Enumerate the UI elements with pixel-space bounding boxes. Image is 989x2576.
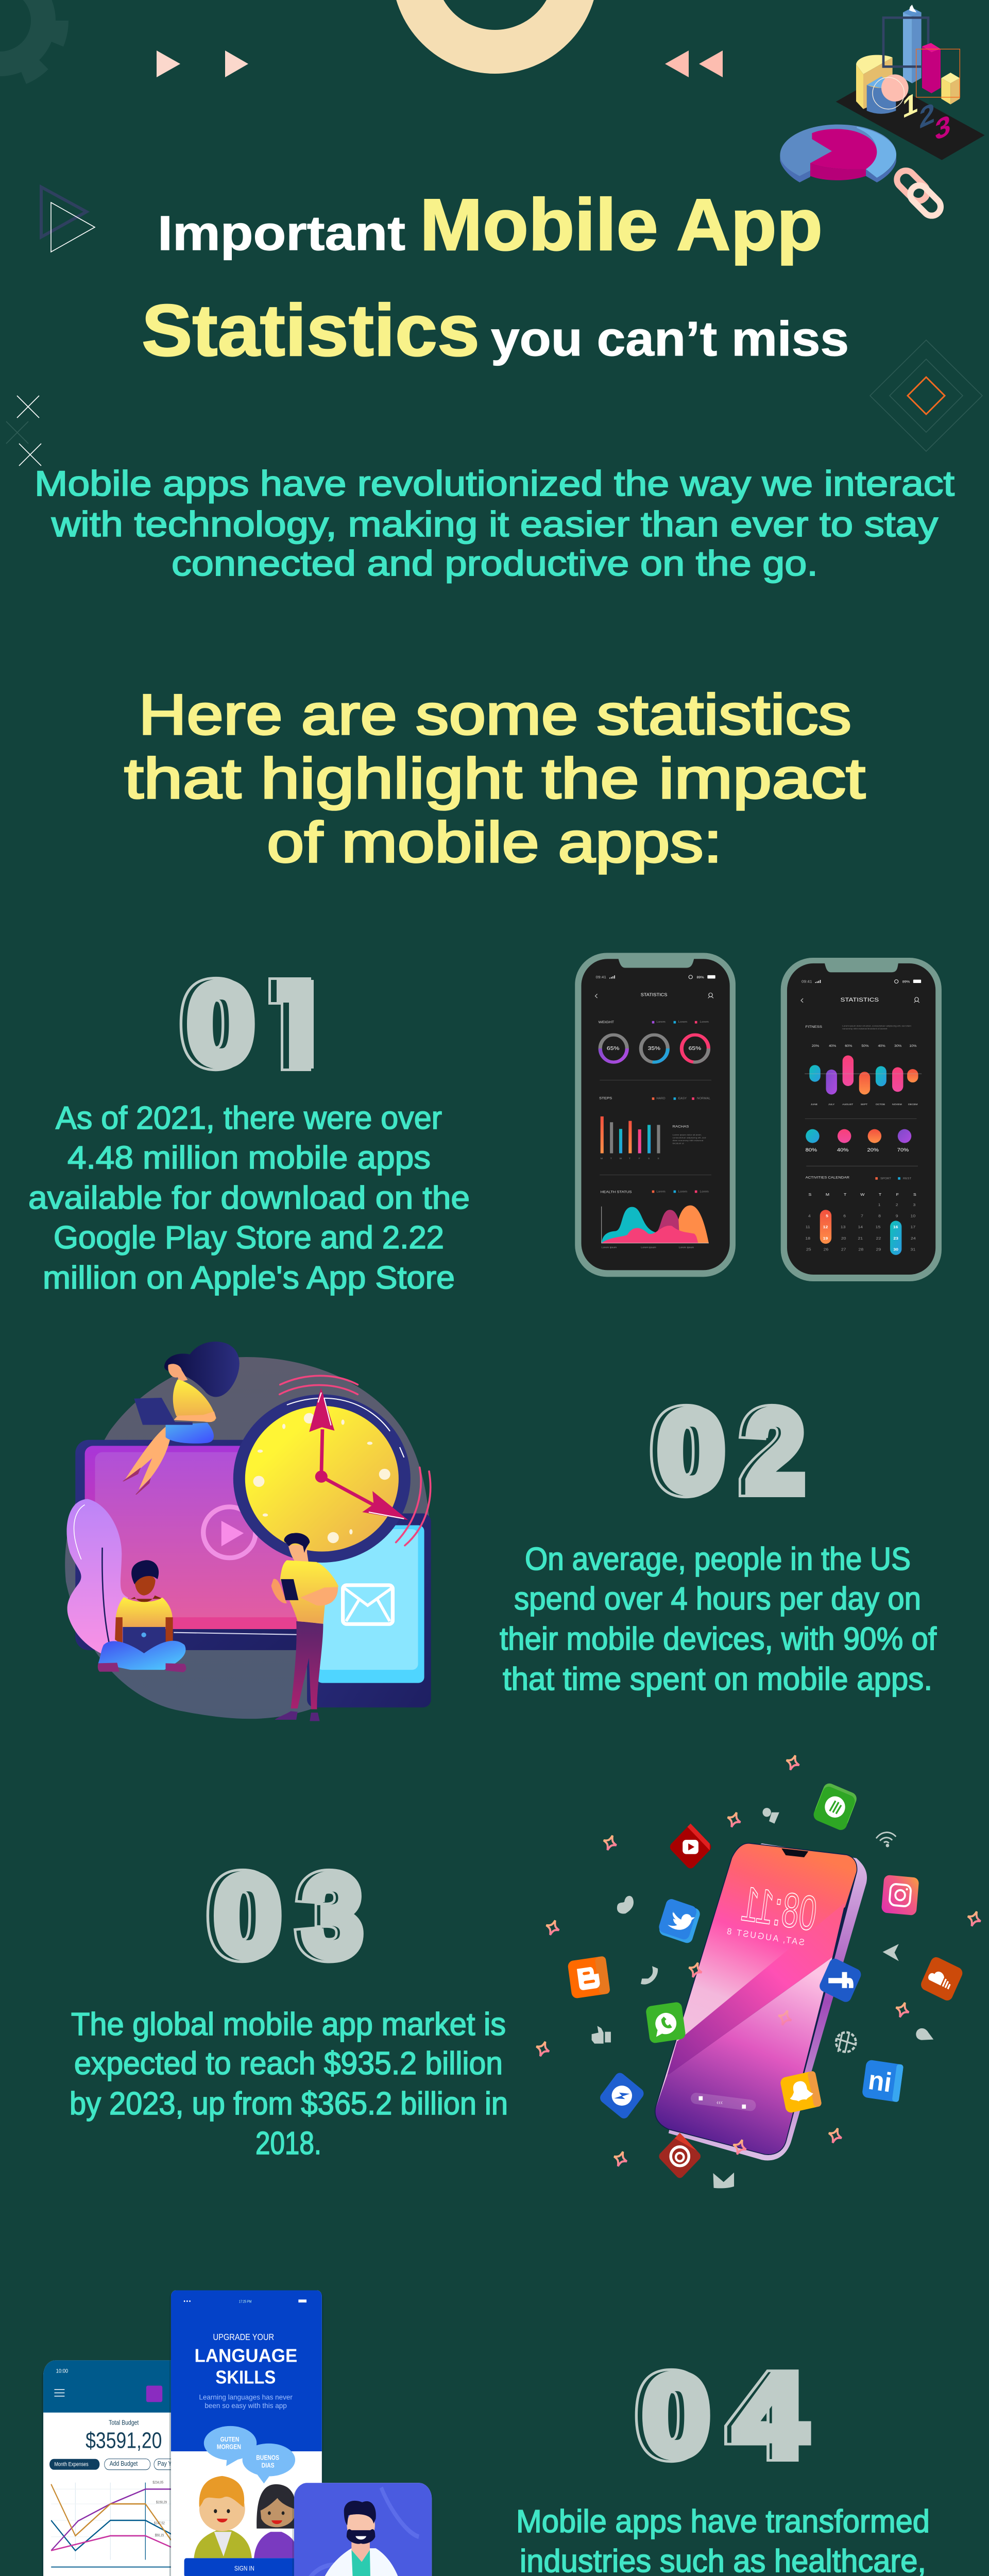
intro paragraph: Mobile apps have revolutionized the way we interact (35, 464, 954, 503)
stat 03 number: 3 (298, 1851, 362, 1980)
intro paragraph: with technology, making it easier than ever to stay (51, 504, 939, 544)
boy (194, 2476, 252, 2558)
weight rings: 65% (689, 1046, 701, 1052)
activities calendar: 29 (876, 1247, 881, 1251)
steps bars: consectetuer adipiscing elit, sed (673, 1137, 706, 1139)
activities calendar: 15 (876, 1225, 881, 1229)
stat 03 text: 2018. (255, 2126, 321, 2161)
stat 04 number: 0 (637, 2350, 706, 2480)
phone two: Lorem ipsum dolor sit amet, consectetuer adipiscing elit, sed diam (842, 1025, 911, 1027)
phone one: STATISTICS (641, 992, 668, 997)
activities calendar: T (844, 1193, 846, 1197)
activities calendar: S (808, 1193, 811, 1197)
plant (66, 1499, 128, 1663)
illustration: phone with floating app icons (534, 1753, 983, 2188)
illustration: isometric charts: 3 (935, 109, 951, 147)
stat 01 number: 0 (186, 959, 255, 1089)
speech bubbles (204, 2426, 295, 2484)
stat 03 text: by 2023, up from $365.2 billion in (70, 2086, 508, 2122)
girl (254, 2484, 295, 2558)
section heading: of mobile apps: (267, 810, 722, 874)
title line two: you can’t miss (491, 312, 849, 366)
fitness pills: SEPT (861, 1103, 867, 1106)
stat 02 number: 2 (745, 1386, 805, 1516)
language app screen (169, 2291, 323, 2576)
phone two: FITNESS (806, 1025, 822, 1029)
stat 03 number: 3 (298, 1851, 362, 1980)
health status area chart (601, 1190, 709, 1249)
stat 01 text: 4.48 million mobile apps (67, 1140, 431, 1176)
progress circles: 80% (806, 1148, 817, 1153)
stat 04 number: 4 (729, 2350, 805, 2480)
stat 02 text: their mobile devices, with 90% of (500, 1621, 937, 1657)
activities calendar: 26 (824, 1247, 829, 1251)
stat 01 text: available for download on the (28, 1180, 470, 1216)
health status area chart: Lorem ipsum (602, 1246, 617, 1249)
phone one: 89% (696, 976, 704, 979)
phone (656, 1843, 867, 2160)
title line one (158, 184, 823, 266)
app icon: bird (657, 1897, 702, 1944)
stat 04 text (506, 2504, 940, 2576)
steps bars: Lorem ipsum dolor sit amet, (673, 1133, 702, 1136)
stat 01 number (181, 959, 314, 1089)
fitness pills: OCTOB (876, 1103, 885, 1106)
phone one: 09:41 (596, 975, 606, 979)
stat 04 number (637, 2350, 806, 2480)
stat 04 number: 4 (729, 2350, 805, 2480)
stat 02 number: 2 (741, 1386, 804, 1516)
decoration: right-pointing triangles (157, 50, 248, 77)
budget app screen (42, 2360, 213, 2576)
fitness pills: 40% (829, 1044, 836, 1048)
title line one: Mobile App (420, 184, 823, 266)
decoration: gear corner (0, 0, 61, 81)
progress circles: 40% (837, 1148, 848, 1153)
steps bars: HARD (656, 1097, 666, 1100)
activities calendar: 16 (893, 1225, 898, 1229)
steps bars: S (648, 1158, 650, 1160)
app icon: ghost (779, 2071, 822, 2114)
activities calendar: ACTIVITIES CALENDAR (806, 1176, 849, 1179)
stat 04 number: 0 (642, 2350, 711, 2480)
title line two: Statistics (142, 290, 480, 371)
stat 02 number: 0 (652, 1386, 721, 1516)
section heading (124, 683, 865, 874)
speech bubbles: GUTEN (220, 2436, 239, 2443)
activities calendar: T (879, 1193, 881, 1197)
stat 04 text: Mobile apps have transformed (516, 2504, 930, 2539)
phone one (575, 953, 736, 1277)
stat 03 number: 0 (213, 1851, 282, 1980)
phone two: STATISTICS (841, 996, 879, 1003)
stat 03 text: The global mobile app market is (71, 2007, 506, 2042)
stat 03 number: 3 (302, 1851, 363, 1980)
steps bars: diam nonummy nibh euismod (673, 1139, 704, 1142)
fitness pills: 30% (894, 1044, 902, 1048)
activities calendar: 5 (826, 1214, 828, 1218)
section heading: Here are some statistics (139, 683, 851, 747)
activities calendar: 2 (896, 1202, 898, 1207)
steps bars: F (639, 1158, 640, 1160)
intro paragraph (35, 464, 954, 583)
weight rings: Lorem (656, 1021, 666, 1024)
activities calendar: 19 (823, 1236, 828, 1241)
progress circles: 20% (867, 1148, 879, 1153)
language app screen: SKILLS (215, 2367, 276, 2387)
weight rings: WEIGHT (599, 1021, 615, 1024)
app icon: at sign (657, 2133, 702, 2180)
stat 03 text (70, 2007, 508, 2161)
stat 04 number: 4 (734, 2350, 806, 2480)
activities calendar (805, 1176, 916, 1255)
budget line chart (51, 2483, 182, 2567)
title line one: Important (158, 206, 405, 261)
doctor app screen (292, 2483, 433, 2576)
activities calendar: 10 (911, 1214, 916, 1218)
phone: SAT, AUGUST 8 (725, 1926, 805, 1947)
motion arcs (280, 1376, 431, 1546)
stat 02 text: spend over 4 hours per day on (514, 1581, 921, 1617)
activities calendar: 13 (841, 1225, 846, 1229)
app icon: social f (818, 1957, 863, 2004)
steps bars: STEPS (599, 1096, 612, 1100)
progress circles (806, 1129, 911, 1153)
stat 02 number: 0 (652, 1386, 721, 1516)
health status area chart: Lorem (678, 1191, 687, 1193)
activities calendar: 23 (893, 1236, 899, 1241)
activities calendar: 24 (911, 1236, 916, 1241)
woman with laptop (123, 1342, 240, 1495)
decoration: nested diamonds (870, 340, 982, 451)
stat 03 number: 0 (208, 1851, 277, 1980)
stat 03 number: 0 (208, 1851, 277, 1980)
steps bars: EASY (678, 1097, 687, 1100)
decoration: cream ring (414, 0, 576, 52)
budget app screen: 10:00 (56, 2368, 68, 2375)
fitness pills: JUNE (811, 1103, 817, 1106)
activities calendar: 7 (861, 1214, 863, 1218)
fitness pills: 40% (878, 1044, 885, 1048)
activities calendar: 8 (878, 1214, 881, 1218)
health status area chart: Lorem (700, 1191, 709, 1193)
budget app screen: $50,15 (155, 2534, 164, 2537)
weight rings: 65% (607, 1046, 619, 1052)
fitness pills: 20% (812, 1044, 819, 1048)
steps bars: W (619, 1158, 622, 1160)
clock (233, 1388, 411, 1563)
illustration: isometric charts (780, 5, 985, 219)
stat 01 text: As of 2021, there were over (56, 1100, 442, 1136)
fitness pills: AUGUST (842, 1103, 853, 1106)
steps bars: RACHAS (673, 1125, 689, 1128)
activities calendar: REST (903, 1177, 912, 1180)
activities calendar: 20 (841, 1236, 846, 1241)
budget app screen: Month Expenses (55, 2462, 89, 2468)
activities calendar: 11 (806, 1225, 810, 1229)
steps bars: S (657, 1158, 659, 1160)
app icon: ni (862, 2059, 903, 2103)
illustration: people, clock and devices (65, 1342, 431, 1721)
activities calendar: F (896, 1193, 899, 1197)
fitness pills: JULY (828, 1103, 835, 1106)
steps bars: tincidunt ut (673, 1142, 685, 1145)
fitness pills: NOVEM (892, 1103, 902, 1106)
section heading: that highlight the impact (124, 747, 865, 810)
budget app screen: $150,29 (156, 2500, 167, 2504)
health status area chart: HEALTH STATUS (601, 1190, 632, 1194)
stat 03 text: expected to reach $935.2 billion (74, 2046, 503, 2081)
activities calendar: 14 (858, 1225, 863, 1229)
language app screen: Learning languages has never (199, 2393, 293, 2401)
activities calendar: M (826, 1193, 829, 1197)
illustration: isometric charts: 1 (902, 86, 918, 125)
steps bars: T (610, 1158, 612, 1160)
health status area chart: Lorem (656, 1191, 666, 1193)
app icon: ni: ni (866, 2064, 894, 2098)
activities calendar: 31 (911, 1247, 916, 1251)
stat 04 number: 0 (637, 2350, 706, 2480)
stat 02 text: that time spent on mobile apps. (503, 1662, 932, 1697)
budget app screen: Pay Y (158, 2460, 172, 2467)
weight rings: Lorem (700, 1021, 709, 1024)
budget app screen: $3591,20 (86, 2428, 162, 2453)
app icon: chat (645, 2002, 686, 2044)
speech bubbles: BUENOS (256, 2454, 279, 2462)
steps bars: T (629, 1158, 630, 1160)
activities calendar: 9 (896, 1214, 898, 1218)
activities calendar: 6 (843, 1214, 846, 1218)
phone two: 89% (902, 980, 910, 984)
steps bars: NORMAL (697, 1097, 710, 1100)
activities calendar: SPORT (880, 1177, 892, 1180)
steps bars: M (601, 1158, 603, 1160)
activities calendar: 1 (878, 1202, 881, 1207)
fitness pills: DECEM (908, 1103, 918, 1106)
health status area chart: Lorem ipsum (641, 1246, 656, 1249)
stat 02 text: On average, people in the US (525, 1541, 911, 1577)
steps bars (599, 1096, 710, 1160)
decoration: outlined play triangles (41, 187, 95, 252)
stat 03 number (208, 1851, 363, 1980)
progress circles: 70% (897, 1148, 909, 1153)
stat 02 number: 2 (741, 1386, 804, 1516)
activities calendar: 21 (858, 1236, 863, 1241)
language app screen: UPGRADE YOUR (213, 2332, 274, 2342)
activities calendar: 28 (859, 1247, 864, 1251)
intro paragraph: connected and productive on the go. (172, 544, 818, 583)
activities calendar: 27 (841, 1247, 846, 1251)
language app screen: 17:25 PM (239, 2300, 251, 2304)
illustration: isometric charts: 2 (919, 96, 935, 135)
phone two: 09:41 (802, 979, 812, 984)
standing man with tablet (271, 1533, 338, 1721)
sparkles (534, 1753, 983, 2168)
activities calendar: 4 (808, 1214, 811, 1218)
fitness pills: 10% (909, 1044, 917, 1048)
speech bubbles: MORGEN (217, 2444, 241, 2451)
small grey icons (592, 1808, 933, 2188)
budget app screen: Total Budget (109, 2419, 139, 2427)
app icon: blog (567, 1956, 610, 1999)
stat 02 number (652, 1386, 805, 1516)
phone: ‹‹‹ (717, 2099, 723, 2106)
app icon: cloud (919, 1955, 964, 2003)
activities calendar: W (860, 1193, 865, 1197)
weight rings (599, 1021, 709, 1062)
illustration: three app screens (42, 2291, 433, 2576)
weight rings: 35% (648, 1046, 660, 1052)
budget app screen: $147,52 (154, 2521, 165, 2526)
activities calendar: 17 (911, 1225, 916, 1229)
activities calendar: 12 (823, 1225, 828, 1229)
phone two (781, 958, 942, 1281)
stat 02 number: 0 (657, 1386, 726, 1516)
phone: 08:11 (739, 1876, 820, 1941)
title line two (142, 290, 849, 371)
language app screen: been so easy with this app (204, 2401, 287, 2410)
fitness pills: 60% (845, 1044, 852, 1048)
activities calendar: 25 (806, 1247, 811, 1251)
speech bubbles: DIAS (262, 2462, 275, 2469)
doctor (313, 2501, 406, 2576)
stat 01 number: 0 (181, 959, 250, 1089)
fitness pills (805, 1044, 922, 1106)
budget app screen: Add Budget (110, 2460, 138, 2467)
activities calendar: S (913, 1193, 916, 1197)
activities calendar: 22 (876, 1236, 881, 1241)
phone two: nonummy nibh euismod tincidunt ut laoreet (842, 1028, 888, 1030)
app icon: camera (881, 1875, 919, 1916)
mail tablet (307, 1514, 431, 1707)
stat 01 text: Google Play Store and 2.22 (54, 1220, 444, 1256)
decoration: cross marks (6, 396, 41, 466)
activities calendar: 3 (913, 1202, 916, 1207)
language app screen: LANGUAGE (194, 2345, 297, 2366)
seated man with laptop (98, 1560, 186, 1672)
language app screen: SIGN IN (234, 2565, 254, 2572)
stat 01 number: 0 (181, 959, 250, 1089)
app icon: video (668, 1823, 713, 1870)
app icon: green (812, 1782, 859, 1832)
decoration: left-pointing triangles (665, 50, 723, 77)
budget app screen: $234,05 (152, 2481, 164, 2485)
stat 01 text: million on Apple's App Store (43, 1260, 455, 1296)
stat 01 text (28, 1100, 470, 1296)
weight rings: Lorem (678, 1021, 687, 1024)
fitness pills: 50% (861, 1044, 869, 1048)
app icon: messenger (598, 2071, 645, 2121)
health status area chart: Lorem ipsum (679, 1246, 694, 1249)
title (142, 184, 849, 371)
illustration: two statistics phones (575, 953, 942, 1281)
activities calendar: 18 (805, 1236, 811, 1241)
activities calendar: 30 (893, 1247, 899, 1251)
stat 02 text (500, 1541, 937, 1697)
video screen (75, 1440, 313, 1650)
